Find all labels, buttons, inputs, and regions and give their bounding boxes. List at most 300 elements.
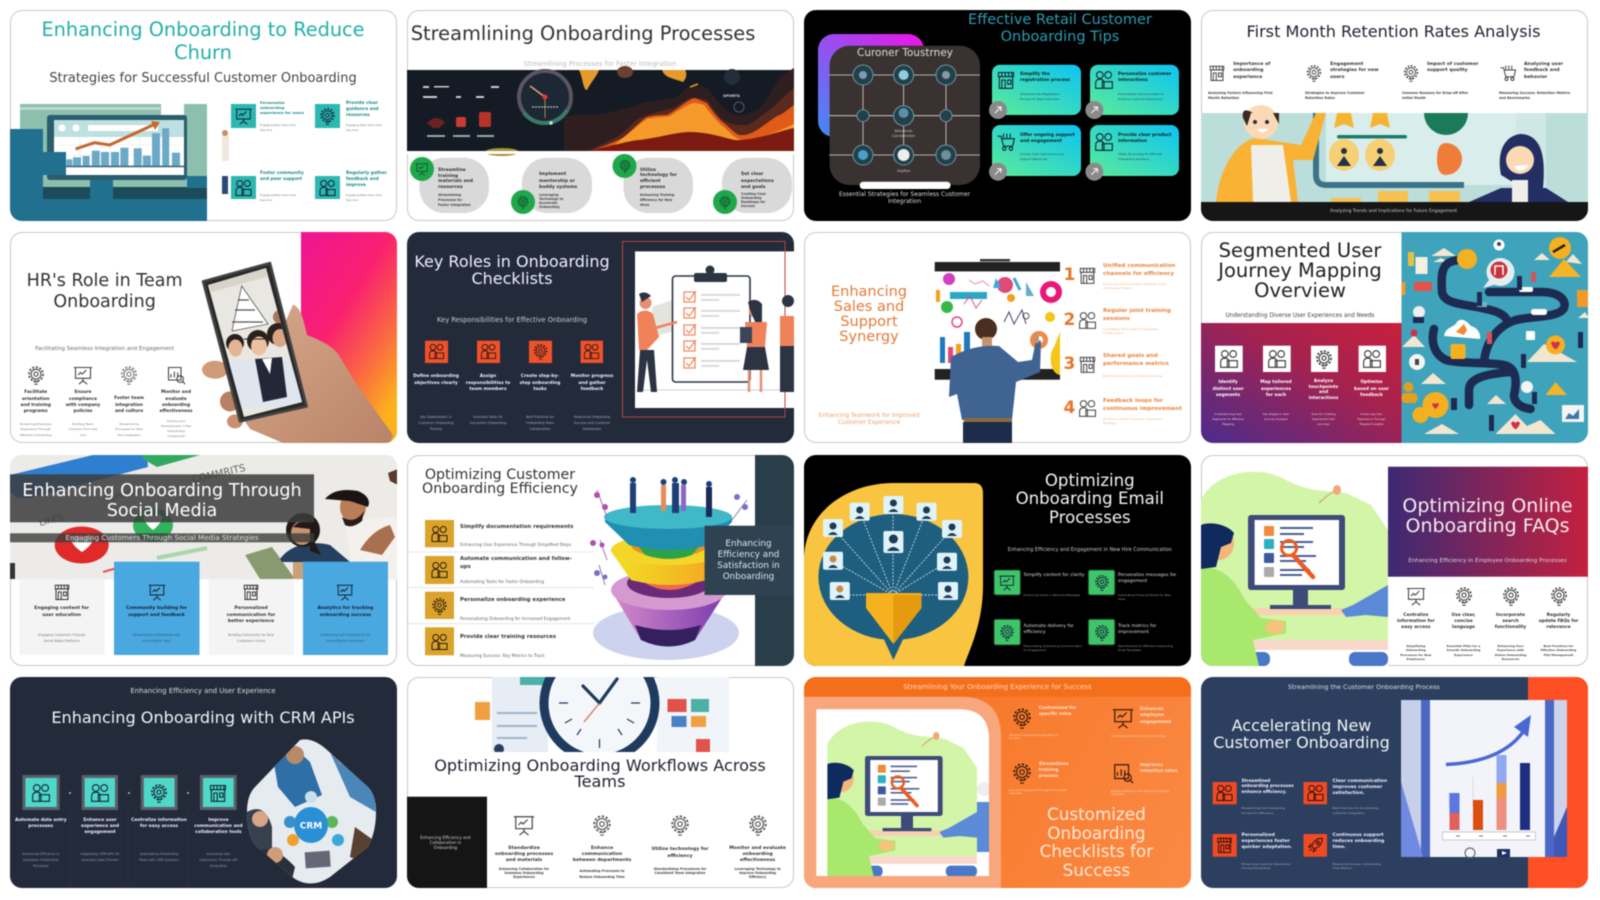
faq note 4: Best Practices for [1543,644,1574,648]
benefit text 2: satisfaction. [1332,791,1365,796]
tip text: personalize [1118,70,1172,83]
card note 3: Customers Online [237,639,265,643]
benefit note 2: Customer Integration [1332,811,1365,815]
icon: engagement [1111,707,1135,729]
role text 4 [571,374,613,393]
step text 1: orientation [22,397,49,402]
icon: create [532,343,549,360]
row heading 2 [460,555,572,571]
item: goals note: Roadmaps for [741,200,765,204]
workflow text 4: Monitor and evaluate [729,846,786,851]
title: Onboarding [53,292,156,312]
faq note 3: Online Onboarding [1495,653,1526,657]
panel: Optimizing Online Onboarding FAQs [1200,455,1588,666]
title: Streamlining Onboarding Processes [411,22,755,45]
title [1016,472,1164,527]
card text 3: better experience [228,619,274,624]
benefit text 1: onboarding processes [1242,783,1294,788]
icon: customized [1010,707,1034,729]
faq note 1: Simplifying [1406,644,1425,648]
step text 3: integration [115,403,143,408]
item note 4: Strategy [1103,421,1116,425]
card text 1 [34,606,89,619]
tip note: support [1020,152,1064,161]
segment note 2: Key Stages in User [1263,412,1289,416]
side callout: Enhancing [725,538,772,548]
icon: mentorship [517,195,529,210]
side note [420,834,471,850]
title: Onboarding Tips [1001,29,1119,45]
item: training text: materials and [438,179,473,184]
icon: personalize [430,596,449,614]
benefit note 3: Ensuring Engagement Through Personalized [1009,788,1066,792]
tip note: personalize [1118,92,1164,101]
item text 4: behavior [1524,75,1547,80]
item text 2 [1330,62,1379,82]
subtitle [819,413,919,426]
benefit text 3: quicker adaptation. [1242,845,1292,850]
faq text 3: Incorporate [1496,613,1525,618]
step note 1: Effective Onboarding [20,433,51,437]
icon: integration [119,365,139,385]
step note 1: Enhancing Efficiency in [22,852,59,856]
role text 1: Define onboarding [413,374,459,379]
item text 3: support quality [1427,68,1468,73]
role note 3 [526,414,554,432]
faq text 2: concise [1454,619,1473,624]
item: technology text: processes [640,185,665,190]
segment note 4: Enhancing User [1361,412,1382,416]
workflow note 1: Experiences [513,875,535,879]
step text 2 [81,818,119,836]
benefit note 1: Success [1009,737,1019,740]
illustration: avatars funnel [804,455,1191,666]
item: technology note: Enhancing Training [640,193,674,197]
workflow note 4: Leveraging Technology to [734,867,781,871]
workflow note 3: Consistent Team Integration [654,871,705,875]
item note 2: Leveraging Technology for Seamless [1103,327,1158,331]
step note 3: Hire Integration [117,433,141,437]
title: Onboarding Email [1016,489,1164,508]
title [422,468,578,496]
step text 1: programs [24,409,48,414]
illustration: presenter at whiteboard [804,232,1191,443]
subtitle: Key Responsibilities for Effective Onboarding [437,316,587,324]
tip note 3: for Engagement [1024,648,1046,652]
step text 4: collaboration tools [195,830,242,835]
segment text 4 [1354,380,1389,399]
side callout: Onboarding [723,572,774,582]
row heading 2: Automate communication and follow- [460,556,572,562]
tip text 2 [1118,572,1176,585]
workflow text 1: Standardize [508,846,540,851]
icon: product [1094,132,1114,152]
icon: collaboration [208,783,228,803]
role note 2: Essential Tasks for [473,415,503,419]
icon: analytics [336,583,354,601]
faq note 3: Enhancing User [1497,644,1524,648]
icon: experiences [1266,349,1286,369]
panel: Streamlining Onboarding Processes [407,10,794,221]
title [27,271,183,312]
tip text: support [1020,132,1076,144]
step note 4 [161,419,191,438]
benefit text 2: Clear communication [1332,779,1387,784]
item note 2: Retention Rates [1305,96,1335,100]
role text 1 [413,374,459,387]
item note 3: Best Practices for Joint Problem-Solving [1103,374,1162,378]
tip text 3: Automate delivery for [1024,624,1074,628]
step note 3: Automating Onboarding [140,852,178,856]
item note 4 [1499,90,1570,101]
item: goals note: Onboarding [741,196,761,200]
caption [838,190,971,206]
card text 1: Engaging content for [34,606,89,611]
icon: store [997,71,1015,90]
item text: feedback: feedback and [346,177,379,182]
step text 3 [131,818,187,830]
benefit note 2: Customizing Onboarding for Diverse Roles [1111,734,1166,738]
segment text 2: Map tailored [1260,380,1292,385]
title [414,254,610,287]
item: technology note: Efficiency for New [640,198,672,202]
title: Social Media [107,501,217,521]
benefit text 1: specific roles [1039,712,1071,717]
benefit text 1: Streamlined [1242,778,1270,783]
segment text 4: feedback [1360,393,1383,398]
tip note: product [1118,152,1162,161]
tip text: registration [1020,70,1070,83]
role note 2: Successful Onboarding [470,421,506,425]
segment note 1: Segments for Effective [1212,417,1244,421]
segment text 2: experiences [1261,387,1291,392]
benefit text 1: Customized for [1039,706,1076,711]
diagram node label 2: StipRys [897,169,910,173]
tip note 3: Personalizing Onboarding Communication [1024,644,1082,648]
faq note 3 [1495,644,1526,661]
workflow note 4: Improve Onboarding [739,871,776,875]
tip text: personalize: interactions [1118,78,1148,83]
title: Customized [1047,804,1146,824]
step text 4: communication and [194,824,243,829]
item note 1 [1103,282,1166,290]
item note 3: Common Reasons for Drop-off After [1402,90,1468,94]
step text 2: compliance [69,397,97,402]
step text 2: policies [74,409,92,414]
item heading 3 [1103,352,1169,368]
item text 3 [1427,62,1478,75]
diagram node label: Constrtiction [892,134,915,138]
item text 3: Impact of customer [1427,62,1478,67]
segment note 2 [1263,412,1289,422]
step text 3: Foster team [114,396,144,401]
item note 2: Strategies to Improve Customer [1305,90,1365,94]
segment text 3 [1309,379,1338,402]
workflow note 3: Standardizing Procedures for [654,866,706,870]
item: goals text [740,170,774,190]
role text 3: step onboarding [520,381,560,386]
panel: Optimizing Onboarding Workflows Across Teams [407,677,794,888]
benefit text 4: Improves [1140,762,1163,768]
icon: feedback [1078,399,1097,418]
segment text 4: Optimize [1360,380,1383,385]
item: technology note [640,192,675,207]
segment note 3: Tools for Creating [1311,412,1336,416]
title: Sales and [834,299,904,315]
item text 1: experience [1233,75,1262,80]
benefit note 1: Process for Efficiency [1242,811,1273,815]
item heading 3: performance metrics [1103,361,1169,367]
item note 1: and Support Teams [1103,286,1132,290]
item: training text: training [438,174,458,179]
tip text 3 [1024,624,1074,636]
title: Enhancing Onboarding Through [22,480,302,500]
faq text 1 [1397,613,1435,631]
title: Enhancing [831,284,907,300]
illustration: social media photo: LIKES [38,513,65,529]
item: mentorship note: Leveraging [539,192,558,196]
tip text: product [1118,132,1172,144]
icon: clarity [998,574,1016,591]
item note 1: Enhancing Communication Between Sales [1103,282,1166,286]
icon: personalize [1092,574,1110,591]
segment note 1: Mapping [1222,422,1234,426]
workflow text 2: Enhance [591,846,613,851]
title: Optimizing [1045,470,1135,490]
panel: First Month Retention Rates Analysis [1200,10,1588,221]
card note 2 [133,632,180,644]
role note 3: Best Practices for [526,415,554,419]
tip text 1: Simplify content for clarity [1024,572,1084,578]
number 2: 2 [1064,310,1075,330]
title: Effective Retail Customer [968,12,1152,28]
item note 1 [1208,90,1273,101]
item heading 3: Shared goals and [1103,353,1158,359]
item: mentorship note: Onboarding [539,205,559,209]
item note 1: Analyzing Factors Influencing First [1208,90,1273,94]
item: goals note: Success [741,204,755,208]
benefit text 3: process [1039,774,1058,779]
tip text 4 [1118,624,1156,636]
icon: store [1209,65,1225,82]
item text 2: strategies for new [1330,68,1379,73]
benefit text 3 [1242,833,1292,852]
benefit text 4 [1332,833,1384,852]
title: Enhancing Onboarding with CRM APIs [51,708,355,727]
benefit text 2: improves customer [1332,785,1382,790]
row note 3: Personalizing Onboarding for Increased Engagement [460,616,570,620]
faq text 2: Use clear, [1452,613,1475,618]
segment text 3: interactions [1309,396,1338,401]
faq note 1: Onboarding [1406,648,1426,652]
faq note 2: Essential FAQs for a [1447,644,1480,648]
segment text 1 [1213,380,1244,399]
title [968,12,1153,45]
illustration: layered funnel [407,455,794,666]
item note: feedback: Engaging New Users from [346,193,382,197]
icon: communication [242,583,260,601]
map: pale mountains [1402,248,1588,434]
step text 1: Automate data entry [15,818,67,823]
side note: Enhancing Efficiency and [420,834,471,840]
title: First Month Retention Rates Analysis [1247,22,1540,41]
step text 3 [114,396,144,415]
tip note: personalize: Personalized Communication to [1118,92,1164,96]
item note 2 [1305,90,1365,101]
segment text 3: Analyze [1314,379,1333,384]
icon: metrics [1092,624,1110,641]
workflow text 2: between departments [573,858,631,863]
diagram heading: Curoner Toustrney [857,47,953,59]
segment note 1 [1212,412,1244,427]
illustration: checklist search scene [804,676,1192,888]
icon: personalized [1214,836,1234,854]
role note 2 [470,414,506,426]
workflow text 1 [495,846,553,864]
icon: compliance [73,365,93,385]
item text: personalize [260,100,304,115]
segment note 2: Journey Analysis [1265,417,1287,421]
role note 1: Process [430,427,442,431]
title: Customer Onboarding [1213,733,1390,752]
tip note: registration [1020,92,1060,101]
title: Segmented User [1219,239,1381,262]
step note 2: Seamless Data Transfer [81,858,119,862]
workflow note 3 [654,866,706,876]
benefit note 1: Streamlining the Onboarding [1242,806,1285,810]
item note 2: Collaboration [1103,331,1123,335]
benefit note 1 [1242,806,1285,816]
faq text 2: language [1452,625,1475,630]
item heading 1: channels for efficiency [1103,271,1174,277]
number 1: 1 [1064,265,1075,285]
panel: Enhancing Onboarding Through Social Media [10,455,397,666]
benefit note 2: Best Practices for Accelerating [1332,806,1378,810]
item text: community [260,170,304,182]
item text: personalize: onboarding [260,105,285,110]
workflow text 3: Utilize technology for [652,847,708,852]
title [22,480,302,521]
step text 4: evaluate [165,397,187,402]
segment text 2 [1260,380,1292,399]
step note 1: Enhancing Employee [20,422,51,426]
eyebrow: Enhancing Efficiency and User Experience [130,687,276,695]
faq text 1: Centralize [1403,613,1428,618]
benefit text 2 [1140,707,1171,726]
icon: documentation [430,525,449,543]
item: mentorship note: Technology to [539,197,563,201]
card note 4: Social Media Interaction [326,639,365,643]
item: training text: Streamline [438,168,466,173]
workflow note 4: Efficiency [749,875,766,879]
faq text 1: information for [1397,619,1435,624]
item text: community: and peer support [260,176,302,182]
benefit note 1 [1009,734,1059,740]
item text 4 [1524,62,1563,82]
icon: continuous support [1306,836,1324,854]
side callout: Satisfaction in [717,561,780,571]
panel: HR's Role in Team Onboarding [10,232,397,443]
item note: guidance: Day One [346,128,358,132]
tip text 4: improvement [1118,630,1149,635]
item text: guidance: resources [346,113,370,118]
role text 2 [466,374,510,393]
faq text 4: update FAQs for [1539,619,1578,624]
benefit text 2: employee [1140,713,1164,718]
step note 1: Processes [33,864,49,868]
item: training text: resources [438,185,463,190]
panel: Customized Onboarding Checklists for Success [804,677,1191,888]
item note 4: Measuring Success: Retention Metrics [1499,90,1570,94]
role text 3 [520,374,560,393]
icon: cart [1498,64,1516,82]
illustration: customer journey network [817,33,1180,190]
tip text: support: and engagement [1020,139,1062,144]
step text 2: Enhance user [83,818,117,823]
panel: Optimizing Onboarding Email Processes [804,455,1191,666]
benefit note 3: Checklists [1009,792,1022,795]
item note 3: Initial Month [1402,96,1426,100]
item: goals text: Set clear [741,172,764,177]
step text 4: Monitor and [161,390,191,395]
step text 4 [194,818,243,836]
illustration: clipboard checklist team [407,232,794,443]
item: mentorship text: mentorship or [539,178,575,184]
item: goals note [740,192,766,208]
faq text 3 [1495,613,1526,631]
icon: optimize [1362,349,1382,369]
workflow note 1: Seamless Onboarding [504,871,544,875]
icon: standardize [513,814,535,836]
icon: education [53,583,71,601]
step note 4: Onboarding [167,429,185,433]
item text: guidance: Provide clear [346,100,378,106]
benefit note 3 [1009,788,1066,795]
illustration: phone in hand [201,231,398,444]
item note 1: Month Retention [1208,96,1239,100]
item text: personalize: Personalize [260,100,285,105]
item text: personalize: experience for users [260,110,304,115]
tip note: personalize: Enhance Customer Experience [1118,97,1162,101]
benefit text 4: time. [1332,845,1346,850]
subtitle: Enhancing Efficiency in Employee Onboarding Processes [1408,558,1567,564]
workflow text 2: communication [582,852,622,857]
item: training note [438,192,472,207]
card text 4 [317,606,373,619]
benefit text 4: retention rates [1140,769,1177,774]
step text 4: effectiveness [160,409,192,414]
step note 4: Component [167,434,185,438]
subtitle: Enhancing Efficiency and Engagement in New Hire Communication [1008,547,1172,553]
benefit text 2: Enhances [1140,707,1164,712]
tip note: registration: Streamline the Registration [1020,92,1060,96]
benefit text 3: experiences foster [1242,839,1290,844]
icon: orientation [26,365,46,385]
row heading 3: Personalize onboarding experience [460,597,565,603]
workflow note 2: Automating Processes to [579,868,625,872]
icon: streamlined [1214,784,1234,802]
icon: experience [90,783,110,803]
step text 2: engagement [84,830,116,835]
title [434,758,766,791]
role text 1: objectives clearly [414,381,458,386]
illustration: social media photo: LIKE [42,473,64,488]
item note: guidance [346,122,382,132]
step note 2 [68,422,98,438]
faq note 1 [1400,644,1431,661]
tip text 4: Track metrics for [1118,624,1156,628]
card note 1: Social Media Platforms [44,639,80,643]
